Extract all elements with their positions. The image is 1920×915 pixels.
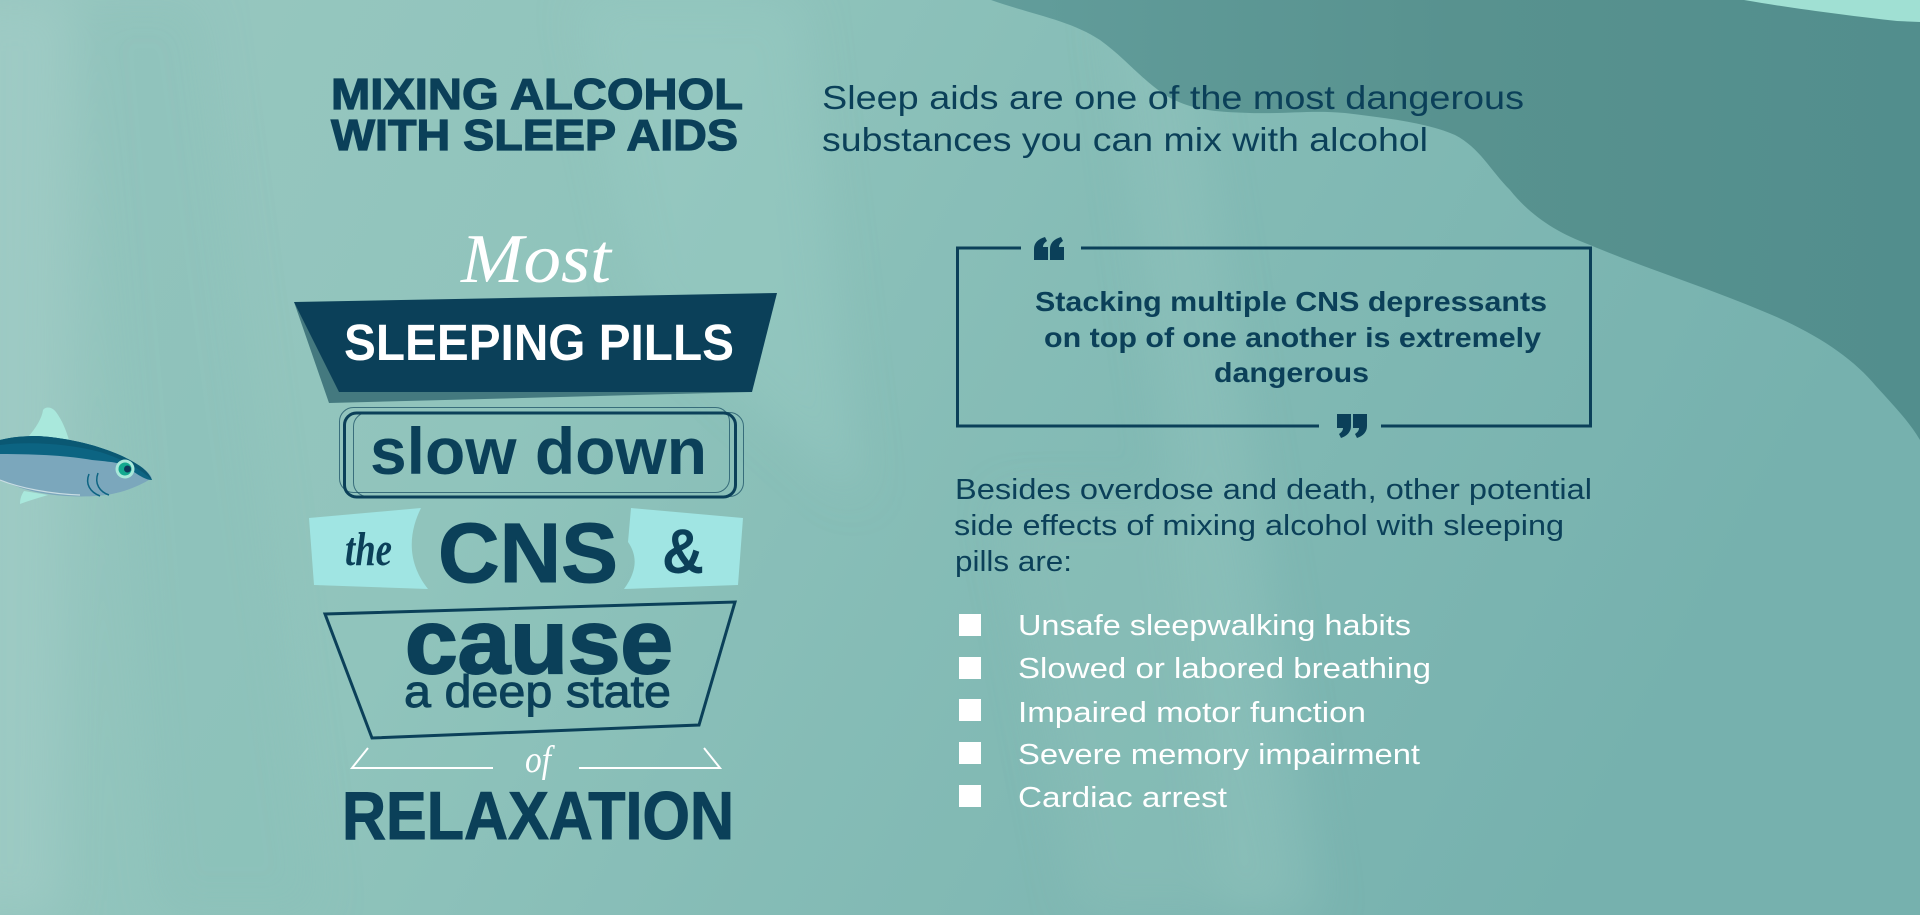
title bbox=[331, 70, 743, 160]
body paragraph bbox=[954, 474, 1592, 578]
list item 5 bbox=[959, 782, 1227, 814]
typographic panel: sleeping pills lockup bbox=[294, 221, 777, 854]
subtitle bbox=[822, 79, 1524, 158]
word: CNS: CNS bbox=[438, 506, 618, 600]
opening quote mark bbox=[1034, 237, 1064, 260]
quote frame bbox=[958, 248, 1590, 426]
script word: Most: Most bbox=[460, 221, 613, 298]
fish gills bbox=[88, 473, 109, 496]
list item 3: Impaired motor function bbox=[1018, 697, 1366, 729]
right bracket line bbox=[579, 748, 720, 768]
quote text: on top of one another is extremely bbox=[1044, 322, 1541, 353]
list item 2: Slowed or labored breathing bbox=[1018, 653, 1431, 685]
title: MIXING ALCOHOL bbox=[331, 70, 743, 119]
fish illustration bbox=[0, 408, 152, 504]
fish back shade bbox=[0, 436, 152, 480]
right tag: ampersand: & bbox=[662, 517, 704, 587]
script word: of: of bbox=[525, 739, 555, 781]
fish top fin bbox=[28, 408, 69, 440]
outlined box: slow down: slow down bbox=[370, 414, 707, 488]
subtitle: Sleep aids are one of the most dangerous bbox=[822, 79, 1524, 116]
banner: sleeping pills: SLEEPING PILLS bbox=[344, 314, 734, 371]
light wave corner, top right bbox=[1744, 0, 1920, 22]
list item 4: Severe memory impairment bbox=[1018, 739, 1420, 771]
banner: sleeping pills bbox=[294, 293, 777, 392]
quote text bbox=[1035, 286, 1547, 388]
word: relaxation: RELAXATION bbox=[342, 778, 734, 854]
left bracket line bbox=[352, 748, 493, 768]
fish body bbox=[0, 436, 152, 496]
outlined trapezoid: cause a deep state: cause bbox=[405, 592, 673, 693]
body paragraph: pills are: bbox=[955, 546, 1072, 578]
quote text: dangerous bbox=[1214, 357, 1369, 388]
banner shadow bbox=[294, 302, 752, 403]
body paragraph: side effects of mixing alcohol with sleeping bbox=[954, 510, 1564, 542]
title: WITH SLEEP AIDS bbox=[331, 111, 738, 160]
subtitle: substances you can mix with alcohol bbox=[822, 121, 1428, 158]
body paragraph: Besides overdose and death, other potential bbox=[955, 474, 1592, 506]
outlined box: slow down bbox=[340, 408, 744, 497]
right tag: ampersand bbox=[624, 508, 743, 589]
side effects list bbox=[959, 610, 1431, 814]
outlined trapezoid: cause a deep state: a deep state bbox=[404, 666, 671, 717]
dark wave shape, top right bbox=[991, 0, 1920, 440]
fish eye bbox=[116, 460, 134, 478]
left tag: the: the bbox=[345, 523, 392, 576]
fish lower fin bbox=[20, 491, 48, 504]
fish dark back bbox=[0, 436, 152, 480]
outlined trapezoid: cause a deep state bbox=[325, 592, 735, 738]
quote box bbox=[958, 237, 1590, 438]
left tag: the bbox=[309, 508, 428, 589]
fish white stripe bbox=[0, 480, 80, 495]
list item 1: Unsafe sleepwalking habits bbox=[1018, 610, 1411, 642]
list item 5: Cardiac arrest bbox=[1018, 782, 1227, 814]
quote text: Stacking multiple CNS depressants bbox=[1035, 286, 1547, 317]
closing quote mark bbox=[1337, 414, 1367, 438]
